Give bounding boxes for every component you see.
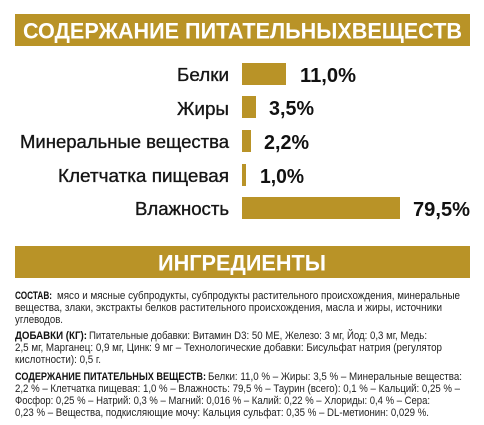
row: moisture xyxy=(135,197,470,221)
text block: composition: углеводов. xyxy=(15,314,63,326)
row: fibre xyxy=(58,164,304,188)
text block: composition: вещества, злаки, экстракты белков растительного происхождения, масла и жиры, источники xyxy=(15,302,442,314)
text block: composition xyxy=(15,290,460,326)
row: moisture: Влажность xyxy=(135,198,229,219)
row: fibre: 1,0% xyxy=(260,166,304,188)
text block: nutrient details: СОДЕРЖАНИЕ ПИТАТЕЛЬНЫХ ВЕЩЕСТВ: xyxy=(15,371,206,383)
banner: ingredients heading xyxy=(15,246,470,278)
row: fat: 3,5% xyxy=(269,98,314,120)
row: protein: Белки xyxy=(177,64,229,85)
row: minerals xyxy=(20,130,309,154)
text block: nutrient details: Белки: 11,0 % – Жиры: 3,5 % – Минеральные вещества: xyxy=(208,371,462,383)
banner: nutrients heading: СОДЕРЖАНИЕ ПИТАТЕЛЬНЫХВЕЩЕСТВ xyxy=(23,18,462,44)
row: fat xyxy=(177,96,314,120)
banner: ingredients heading: ИНГРЕДИЕНТЫ xyxy=(158,250,326,276)
text block: nutrient details: 0,23 % – Вещества, подкисляющие мочу: Кальция сульфат: 0,35 % – DL-метионин: 0,029 %. xyxy=(15,407,429,419)
text block: additives xyxy=(15,329,442,366)
row: protein xyxy=(177,63,356,87)
text block: nutrient details xyxy=(15,371,462,419)
text block: composition: СОСТАВ: xyxy=(15,290,52,302)
row: moisture: 79,5% xyxy=(413,199,470,221)
text block: composition: мясо и мясные субпродукты, субпродукты растительного происхождения, минеральные xyxy=(57,290,460,302)
row: fibre: Клетчатка пищевая xyxy=(58,165,229,186)
row: minerals: 2,2% xyxy=(264,132,309,154)
row: protein: 11,0% xyxy=(300,65,356,87)
text block: nutrient details: Фосфор: 0,25 % – Натрий: 0,3 % – Магний: 0,016 % – Калий: 0,22 % – Хлориды: 0,4 % – Сера: xyxy=(15,395,430,407)
text block: additives: ДОБАВКИ (КГ): xyxy=(15,330,87,342)
text block: additives: кислотности): 0,5 г. xyxy=(15,354,101,366)
row: minerals: Минеральные вещества xyxy=(20,131,230,152)
row: fat: Жиры xyxy=(177,98,229,119)
text block: additives: Питательные добавки: Витамин D3: 50 МЕ, Железо: 3 мг, Йод: 0,3 мг, Медь: xyxy=(89,329,427,342)
bar chart: nutrient content xyxy=(20,63,470,221)
text block: additives: 2,5 мг, Марганец: 0,9 мг, Цинк: 9 мг – Технологические добавки: Бисульфат натрия (регулятор xyxy=(15,342,442,354)
